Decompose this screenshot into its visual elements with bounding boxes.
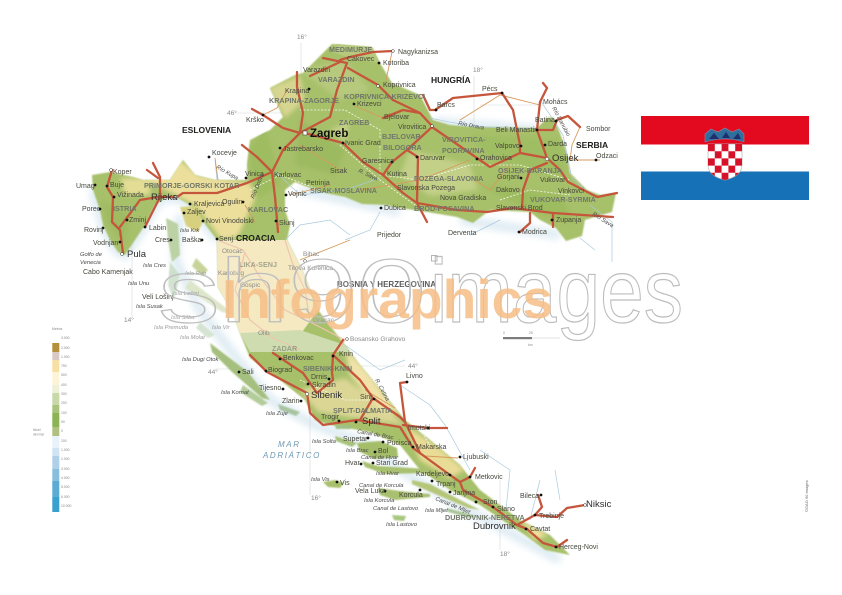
scale bar bbox=[503, 331, 560, 347]
islands and channels names: R. Sava bbox=[357, 168, 379, 183]
elevation legend: 300 bbox=[61, 392, 67, 396]
islands and channels names: Isla Cres bbox=[143, 263, 166, 269]
city names: Nova Gradiska bbox=[440, 195, 486, 202]
city names: Sisak bbox=[330, 168, 348, 175]
city names: Cabo Kamenjak bbox=[83, 269, 133, 276]
islands and channels names: Isla Hvar bbox=[376, 471, 400, 477]
islands bbox=[166, 206, 480, 521]
elevation legend: Nivel bbox=[33, 428, 41, 432]
city names: Bosansko Grahovo bbox=[350, 336, 406, 343]
region names: LIKA-SENJ bbox=[239, 260, 277, 269]
city names: Sinj bbox=[360, 394, 372, 401]
city names: Hvar bbox=[345, 460, 360, 467]
region names: VARAZDIN bbox=[318, 75, 355, 84]
islands and channels names: Canal de Lastovo bbox=[373, 506, 419, 512]
graticule degree labels: 18° bbox=[500, 550, 510, 558]
sea name: MAR bbox=[278, 440, 301, 449]
city names: Skradin bbox=[312, 382, 336, 389]
graticule degree labels bbox=[124, 33, 510, 558]
roads in Lika, faded behind watermark bbox=[217, 240, 345, 355]
coastal sea shading bbox=[93, 122, 560, 560]
graticule degree labels: 46° bbox=[227, 109, 237, 117]
scale bar: 0 bbox=[503, 331, 505, 335]
city names: Karlobag bbox=[218, 270, 244, 277]
islands and channels names: Isla Vis bbox=[311, 477, 330, 483]
city names: Vojnic bbox=[288, 191, 307, 198]
city names: Ogulin bbox=[222, 199, 242, 206]
city names: Ivanic Grad bbox=[345, 140, 381, 147]
city names: Kutina bbox=[387, 171, 407, 178]
flag crown bbox=[705, 128, 744, 142]
islands and channels names: Río Danubio bbox=[550, 106, 571, 138]
watermark: outlined wordmark: sh90 bbox=[158, 242, 426, 342]
watermark: Infographics: Infographics bbox=[222, 268, 553, 330]
scale bar: km bbox=[528, 343, 533, 347]
city names: Slavonska Pozega bbox=[397, 185, 455, 192]
city names: Beli Manastir bbox=[496, 127, 537, 134]
islands and channels names: Golfo de bbox=[80, 252, 103, 258]
islands and channels names: Isla Silba bbox=[171, 315, 195, 321]
city names: Bihac bbox=[303, 251, 320, 258]
city names: Pucisca bbox=[387, 440, 412, 447]
major city names: Pula bbox=[127, 249, 147, 260]
city names: Buje bbox=[110, 182, 124, 189]
city names: Sali bbox=[242, 369, 254, 376]
region names: SPLIT-DALMATIA bbox=[333, 406, 392, 415]
country labels: SERBIA bbox=[576, 140, 608, 150]
city names: Varazdin bbox=[303, 67, 330, 74]
city names: Valpovo bbox=[495, 143, 520, 150]
city names: Garesnica bbox=[362, 158, 394, 165]
credit line: ©GAO 90 Images bbox=[804, 480, 809, 512]
scale bar: 25 bbox=[529, 331, 533, 335]
islands and channels names: Río Drava bbox=[458, 121, 485, 132]
city names: Ljubuski bbox=[463, 454, 489, 461]
major city names: Split bbox=[362, 416, 381, 427]
islands and channels names: Isla Vir bbox=[212, 325, 231, 331]
city names: Knin bbox=[339, 351, 353, 358]
region names: VUKOVAR-SYRMIA bbox=[530, 195, 596, 204]
city names: Pécs bbox=[482, 86, 498, 93]
city names: Gospic bbox=[240, 282, 261, 289]
city names: Biograd bbox=[268, 367, 292, 374]
elevation legend: 3.000 bbox=[61, 336, 70, 340]
city names: Ston bbox=[483, 499, 498, 506]
country labels bbox=[182, 75, 608, 289]
city names: Rovinj bbox=[84, 227, 104, 234]
elevation legend: 0 bbox=[61, 429, 63, 433]
city names: Vela Luka bbox=[355, 488, 386, 495]
city names: Metkovic bbox=[475, 474, 503, 481]
region names: PODRAVINA bbox=[442, 146, 485, 155]
city names: Tijesno bbox=[259, 385, 281, 392]
elevation legend: 1.000 bbox=[61, 448, 70, 452]
elevation legend: 6.000 bbox=[61, 495, 70, 499]
elevation legend: 100 bbox=[61, 411, 67, 415]
region names: SISAK-MOSLAVINA bbox=[310, 186, 377, 195]
elevation legend: 50 bbox=[61, 420, 65, 424]
city names: Krizevci bbox=[357, 101, 382, 108]
islands and channels names: Canal de Hvar bbox=[361, 455, 399, 461]
elevation legend: 200 bbox=[61, 401, 67, 405]
city names: Nagykanizsa bbox=[398, 49, 438, 56]
city names: Umag bbox=[76, 183, 95, 190]
major city names: Dubrovnik bbox=[473, 521, 516, 532]
city names: Virovitica bbox=[398, 124, 426, 131]
city names: Zaljev bbox=[187, 209, 206, 216]
elevation legend: del mar bbox=[33, 432, 45, 436]
elevation legend: 5.000 bbox=[61, 485, 70, 489]
region names: DUBROVNIK-NERETVA bbox=[445, 513, 525, 522]
islands and channels names: Isla Brac bbox=[346, 448, 369, 454]
city names: Trebinje bbox=[539, 513, 564, 520]
country labels: CROACIA bbox=[236, 233, 276, 243]
city names: Karlovac bbox=[274, 172, 302, 179]
city names: Vižinada bbox=[117, 192, 144, 199]
flag shield bbox=[708, 144, 742, 180]
city names: Veli Lošinj bbox=[142, 294, 174, 301]
graticule degree labels: 18° bbox=[473, 66, 483, 74]
city names: Batina bbox=[535, 117, 555, 124]
islands and channels names: Canal de Mljet bbox=[434, 496, 471, 516]
elevation legend bbox=[33, 327, 71, 512]
city names: Cavtat bbox=[530, 526, 550, 533]
city names: Slunj bbox=[279, 220, 295, 227]
region names: ZAGREB bbox=[339, 118, 369, 127]
islands and channels names: R. Cetina bbox=[373, 378, 390, 403]
islands and channels names: Isla Zuje bbox=[266, 411, 289, 417]
major city names: Osijek bbox=[552, 153, 579, 164]
city names: Supetar bbox=[343, 436, 368, 443]
region names: BILOGORA bbox=[383, 143, 422, 152]
region names: KRAPINA-ZAGORJE bbox=[269, 96, 339, 105]
city names: Gracac bbox=[313, 317, 335, 324]
city names: Zlarin bbox=[282, 398, 300, 405]
elevation legend: 3.000 bbox=[61, 467, 70, 471]
city names: Labin bbox=[149, 225, 166, 232]
region names: BJELOVAR- bbox=[382, 132, 424, 141]
islands and channels names: Isla Kornat bbox=[221, 390, 249, 396]
major city names: Zagreb bbox=[310, 128, 348, 140]
city names: Sombor bbox=[586, 126, 611, 133]
county borders bbox=[250, 110, 570, 445]
region names: VIROVITICA- bbox=[442, 135, 486, 144]
rivers bbox=[215, 100, 612, 520]
islands and channels names: Isla Korcula bbox=[364, 498, 395, 504]
city names: Kardeljevo bbox=[416, 471, 449, 478]
islands and channels names: Isla Unu bbox=[128, 281, 150, 287]
city names bbox=[76, 49, 618, 551]
islands and channels names: Isla Lastovo bbox=[386, 522, 418, 528]
islands and channels names: Venecia bbox=[80, 260, 102, 266]
city names: Krapina bbox=[285, 88, 309, 95]
islands and channels names: Isla Molat bbox=[180, 335, 205, 341]
city names: Trogir bbox=[321, 414, 340, 421]
city names: Trpanj bbox=[436, 481, 456, 488]
islands and channels names: Río Kupa bbox=[215, 165, 240, 182]
region names bbox=[113, 45, 596, 522]
islands and channels names: Isla Solta bbox=[312, 439, 337, 445]
city names: Jastrebarsko bbox=[283, 146, 323, 153]
graticule lines bbox=[132, 43, 540, 550]
city names: Bol bbox=[378, 448, 389, 455]
city names: Petrinja bbox=[306, 180, 330, 187]
graticule degree labels: 16° bbox=[311, 494, 321, 502]
islands and channels names: Canal de Korcula bbox=[359, 483, 404, 489]
city names: Koprivnica bbox=[383, 82, 416, 89]
islands and channels names: Río Sava bbox=[591, 212, 615, 230]
city names: Orahovica bbox=[480, 155, 512, 162]
islands and channels names: Isla Lošinj bbox=[173, 291, 199, 297]
city names: Livno bbox=[406, 373, 423, 380]
hollow square marker bbox=[432, 256, 437, 261]
city names: Kocevje bbox=[212, 150, 237, 157]
land: Croatia mainland bbox=[92, 44, 616, 555]
country labels: ESLOVENIA bbox=[182, 125, 231, 135]
city names: Korcula bbox=[399, 492, 423, 499]
islands and channels names: Isla Dugi Otok bbox=[182, 357, 220, 363]
city names: Dakovo bbox=[496, 187, 520, 194]
city names: Prijedor bbox=[377, 232, 402, 239]
city names: Vodnjan bbox=[93, 240, 118, 247]
elevation legend: 4.000 bbox=[61, 476, 70, 480]
city names: Cres bbox=[155, 237, 170, 244]
city names: Vukovar bbox=[540, 177, 566, 184]
islands and channels names: Isla Krk bbox=[180, 228, 200, 234]
elevation legend: 750 bbox=[61, 364, 67, 368]
city names: Titova Korenica bbox=[288, 265, 333, 272]
elevation legend: 200 bbox=[61, 439, 67, 443]
city names: Porec bbox=[82, 206, 101, 213]
city names: Krško bbox=[246, 117, 264, 124]
city names: Gorjani bbox=[497, 174, 520, 181]
city names: Novi Vinodolski bbox=[206, 218, 254, 225]
city names: Vinica bbox=[245, 171, 264, 178]
city names: Modrica bbox=[522, 229, 547, 236]
region names: ISTRIA bbox=[113, 204, 137, 213]
graticule degree labels: 44° bbox=[208, 368, 218, 376]
city names: Cakovec bbox=[347, 56, 375, 63]
elevation legend: 500 bbox=[61, 373, 67, 377]
city names: Janjina bbox=[453, 490, 475, 497]
country labels: HUNGRÍA bbox=[431, 75, 471, 85]
watermark: outlined wordmark: images bbox=[430, 242, 683, 342]
city names: Senj bbox=[219, 236, 233, 243]
major city names: Niksic bbox=[586, 499, 612, 510]
region names: KOPRIVNICA-KRIZEVCI bbox=[344, 92, 425, 101]
sea name: ADRIÁTICO bbox=[262, 451, 321, 460]
city names: Daruvar bbox=[420, 155, 446, 162]
elevation legend: 2.000 bbox=[61, 457, 70, 461]
islands and channels names: Isla Rab bbox=[185, 271, 207, 277]
watermark: outlined wordmark bbox=[158, 242, 683, 342]
city names: Darda bbox=[548, 141, 567, 148]
city names: Baška bbox=[182, 237, 202, 244]
elevation legend: 2.000 bbox=[61, 346, 70, 350]
city names: Vis bbox=[340, 480, 350, 487]
city names: Olib bbox=[258, 330, 270, 337]
city names: Zminj bbox=[129, 217, 147, 224]
elevation legend: 10.000 bbox=[61, 504, 71, 508]
major city names: Sibenik bbox=[311, 390, 342, 401]
city names: Otocac bbox=[222, 248, 243, 255]
city names: Dubica bbox=[384, 205, 406, 212]
islands and channels names: Isla Mljet bbox=[425, 508, 448, 514]
graticule degree labels: 44° bbox=[408, 362, 418, 370]
region names: PRIMORJE-GORSKI KOTAR bbox=[144, 181, 240, 190]
city names: Slano bbox=[497, 506, 515, 513]
city names: Odzaci bbox=[596, 153, 618, 160]
city names: Benkovac bbox=[283, 355, 314, 362]
city names: Kotoriba bbox=[383, 60, 409, 67]
islands and channels names: Río Dobra bbox=[250, 172, 266, 200]
region names: SIBENIK-KNIN bbox=[303, 364, 352, 373]
region names: OSIJEK-BARANJA bbox=[498, 166, 562, 175]
city names: Imotski bbox=[408, 425, 431, 432]
major city names bbox=[127, 128, 612, 532]
elevation legend: Metros bbox=[52, 327, 63, 331]
city names: Herceg-Novi bbox=[559, 544, 598, 551]
country labels: BOSNIA Y HERZEGOVINA bbox=[337, 280, 436, 289]
city names: Mohács bbox=[543, 99, 568, 106]
secondary roads bbox=[215, 52, 600, 458]
city names: Barcs bbox=[437, 102, 455, 109]
city names: Bileca bbox=[520, 493, 539, 500]
islands and channels names: Isla Susak bbox=[136, 304, 164, 310]
city names: Kraljevica bbox=[194, 201, 224, 208]
islands and channels names bbox=[80, 106, 615, 528]
region names: MEDIMURJE bbox=[329, 45, 372, 54]
region names: ZADAR bbox=[272, 344, 298, 353]
flag of Croatia bbox=[641, 116, 809, 200]
islands and channels names: Canal de Brac bbox=[357, 429, 394, 441]
city names: Zupanja bbox=[556, 217, 581, 224]
city names: Bjelovar bbox=[384, 114, 410, 121]
graticule degree labels: 16° bbox=[297, 33, 307, 41]
city names: Slavonski Brod bbox=[496, 205, 543, 212]
city names: Vinkovci bbox=[558, 188, 584, 195]
city names: Koper bbox=[113, 169, 132, 176]
major city names: Rijeka bbox=[151, 192, 178, 203]
city names: Makarska bbox=[416, 444, 446, 451]
city names: Derventa bbox=[448, 230, 477, 237]
region names: BROD-POSAVINA bbox=[414, 204, 475, 213]
islands and channels names: Isla Premuda bbox=[154, 325, 189, 331]
sea name bbox=[262, 440, 321, 460]
elevation legend: 400 bbox=[61, 383, 67, 387]
city names: Drnis bbox=[311, 374, 328, 381]
motorways bbox=[107, 51, 617, 547]
region names: POZEGA-SLAVONIA bbox=[414, 174, 483, 183]
graticule degree labels: 14° bbox=[124, 316, 134, 324]
city names: Stari Grad bbox=[376, 460, 408, 467]
elevation legend: 1.000 bbox=[61, 355, 70, 359]
region names: KARLOVAC bbox=[248, 205, 288, 214]
city dots bbox=[94, 50, 597, 548]
